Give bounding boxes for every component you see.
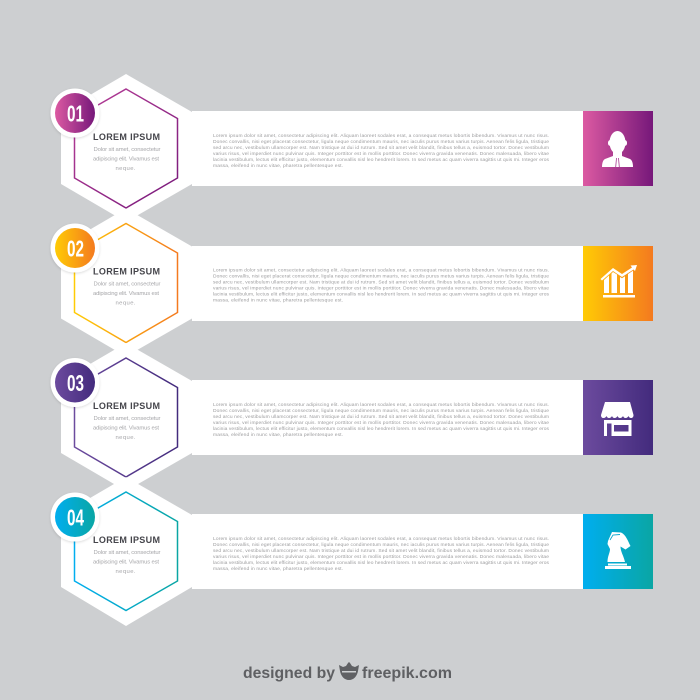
description 3: adipiscing elit. Vivamus est <box>93 426 159 432</box>
body text 1: Lorem ipsum dolor sit amet, consectetur adipiscing elit. Aliquam laoreet sodales erat, a consequat metus lobortis bibendum. Vivamus ut nunc risus. <box>213 133 549 139</box>
row 1 <box>192 111 653 186</box>
footer: designed by freepik.com <box>243 662 452 682</box>
panel: text bar 1 <box>192 111 584 186</box>
outline hexagon 4 <box>74 492 178 610</box>
icon block 2 <box>583 246 653 321</box>
description 4: adipiscing elit. Vivamus est <box>93 560 159 566</box>
description 1: neque. <box>116 166 136 172</box>
row 4 <box>192 514 653 589</box>
body text 4 <box>213 536 550 572</box>
panel: text bar 3 <box>192 380 584 455</box>
footer: designed by freepik.com: designed by <box>243 665 335 682</box>
number badge 01: 01 <box>67 100 84 126</box>
description 3: Dolor sit amet, consectetur <box>94 416 161 422</box>
white hexagon 3 <box>61 343 192 491</box>
body text 2: Donec convallis, nisi eget placerat consectetur, ligula neque condimentum mauris, nec iaculis purus metus varius turpis. Aenean felis ligula, tristique <box>213 274 549 280</box>
body text 4: lacinia vestibulum, lectus elit efficitur justo, elementum convallis nisl leo hendrerit lorem. In sed metus ac quam viverra sagittis ut quis mi. Integer eros <box>213 560 550 566</box>
body text 3: lacinia vestibulum, lectus elit efficitur justo, elementum convallis nisl leo hendrerit lorem. In sed metus ac quam viverra sagittis ut quis mi. Integer eros <box>213 426 550 432</box>
number badge 04: 04 <box>67 504 84 530</box>
body text 2 <box>213 268 550 304</box>
body text 1: massa, eleifend in nunc vitae, pharetra pellentesque est. <box>213 163 343 169</box>
hexagon card 1 <box>61 74 192 222</box>
body text 1: sed arcu nec, vestibulum ullamcorper est. Nam tristique at dui id rutrum. Sed sit amet velit blandit, finibus tellus a, euismod tortor. Donec vestibulum <box>213 145 549 151</box>
white hexagon 2 <box>61 208 192 356</box>
outline hexagon 1 <box>74 89 178 208</box>
description 2: adipiscing elit. Vivamus est <box>93 291 159 297</box>
body text 3 <box>213 402 550 438</box>
heading 1: LOREM IPSUM <box>93 132 160 142</box>
footer: designed by freepik.com: freepik.com <box>362 665 452 682</box>
icon: businessman <box>602 131 633 167</box>
hexagon card 3 <box>61 343 192 491</box>
description 1: adipiscing elit. Vivamus est <box>93 156 159 162</box>
description 1: Dolor sit amet, consectetur <box>94 147 161 153</box>
hexagon card 4 <box>61 477 192 626</box>
description 4: Dolor sit amet, consectetur <box>94 550 161 556</box>
number badge 03: 03 <box>67 370 84 396</box>
icon: freepik crown <box>339 662 359 680</box>
number badge 01 <box>50 88 100 138</box>
body text 3: Donec convallis, nisi eget placerat consectetur, ligula neque condimentum mauris, nec iaculis purus metus varius turpis. Aenean felis ligula, tristique <box>213 408 549 414</box>
body text 4: varius risus, vel imperdiet nunc pulvinar quis. Integer porttitor est in mollis porttitor. Donec viverra gravida venenatis. Donec malesuada, libero vitae <box>213 554 549 560</box>
heading 2: LOREM IPSUM <box>93 266 160 276</box>
body text 4: Lorem ipsum dolor sit amet, consectetur adipiscing elit. Aliquam laoreet sodales erat, a consequat metus lobortis bibendum. Vivamus ut nunc risus. <box>213 536 549 542</box>
row 2 <box>192 246 653 321</box>
number badge 03 <box>50 358 100 407</box>
body text 1: varius risus, vel imperdiet nunc pulvinar quis. Integer porttitor est in mollis porttitor. Donec viverra gravida venenatis. Donec malesuada, libero vitae <box>213 151 549 157</box>
body text 2: varius risus, vel imperdiet nunc pulvinar quis. Integer porttitor est in mollis porttitor. Donec viverra gravida venenatis. Donec malesuada, libero vitae <box>213 286 549 292</box>
description 4: neque. <box>116 569 136 575</box>
icon: chess knight <box>605 532 631 569</box>
body text 3: Lorem ipsum dolor sit amet, consectetur adipiscing elit. Aliquam laoreet sodales erat, a consequat metus lobortis bibendum. Vivamus ut nunc risus. <box>213 402 549 408</box>
white hexagon 4 <box>61 477 192 626</box>
body text 1: Donec convallis, nisi eget placerat consectetur, ligula neque condimentum mauris, nec iaculis purus metus varius turpis. Aenean felis ligula, tristique <box>213 139 549 145</box>
outline hexagon 3 <box>74 358 178 477</box>
outline hexagon 2 <box>74 224 178 342</box>
body text 4: sed arcu nec, vestibulum ullamcorper est. Nam tristique at dui id rutrum. Sed sit amet velit blandit, finibus tellus a, euismod tortor. Donec vestibulum <box>213 548 549 554</box>
number badge 04 <box>50 492 100 542</box>
icon block 4 <box>583 514 653 589</box>
white hexagon 1 <box>61 74 192 222</box>
panel: text bar 4 <box>192 514 584 589</box>
body text 3: massa, eleifend in nunc vitae, pharetra pellentesque est. <box>213 432 343 438</box>
heading 3: LOREM IPSUM <box>93 401 160 411</box>
icon block 1 <box>583 111 653 186</box>
body text 2: lacinia vestibulum, lectus elit efficitur justo, elementum convallis nisl leo hendrerit lorem. In sed metus ac quam viverra sagittis ut quis mi. Integer eros <box>213 292 550 298</box>
body text 3: sed arcu nec, vestibulum ullamcorper est. Nam tristique at dui id rutrum. Sed sit amet velit blandit, finibus tellus a, euismod tortor. Donec vestibulum <box>213 414 549 420</box>
description 2: Dolor sit amet, consectetur <box>94 282 161 288</box>
description 2: neque. <box>116 300 136 306</box>
description 1 <box>93 147 161 172</box>
body text 2: Lorem ipsum dolor sit amet, consectetur adipiscing elit. Aliquam laoreet sodales erat, a consequat metus lobortis bibendum. Vivamus ut nunc risus. <box>213 268 549 274</box>
body text 4: Donec convallis, nisi eget placerat consectetur, ligula neque condimentum mauris, nec iaculis purus metus varius turpis. Aenean felis ligula, tristique <box>213 542 549 548</box>
body text 4: massa, eleifend in nunc vitae, pharetra pellentesque est. <box>213 566 343 572</box>
icon: storefront <box>601 402 634 436</box>
hexagon card 2 <box>61 208 192 356</box>
body text 1 <box>213 133 550 169</box>
description 3: neque. <box>116 435 136 441</box>
description 4 <box>93 550 161 575</box>
number badge 02 <box>50 224 100 272</box>
description 3 <box>93 416 161 441</box>
heading 4: LOREM IPSUM <box>93 535 160 545</box>
icon: growth chart <box>600 265 637 298</box>
row 3 <box>192 380 653 455</box>
panel: text bar 2 <box>192 246 584 321</box>
icon block 3 <box>583 380 653 455</box>
body text 3: varius risus, vel imperdiet nunc pulvinar quis. Integer porttitor est in mollis porttitor. Donec viverra gravida venenatis. Donec malesuada, libero vitae <box>213 420 549 426</box>
body text 1: lacinia vestibulum, lectus elit efficitur justo, elementum convallis nisl leo hendrerit lorem. In sed metus ac quam viverra sagittis ut quis mi. Integer eros <box>213 157 550 163</box>
body text 2: sed arcu nec, vestibulum ullamcorper est. Nam tristique at dui id rutrum. Sed sit amet velit blandit, finibus tellus a, euismod tortor. Donec vestibulum <box>213 280 549 286</box>
body text 2: massa, eleifend in nunc vitae, pharetra pellentesque est. <box>213 298 343 304</box>
number badge 02: 02 <box>67 236 84 262</box>
description 2 <box>93 282 161 306</box>
